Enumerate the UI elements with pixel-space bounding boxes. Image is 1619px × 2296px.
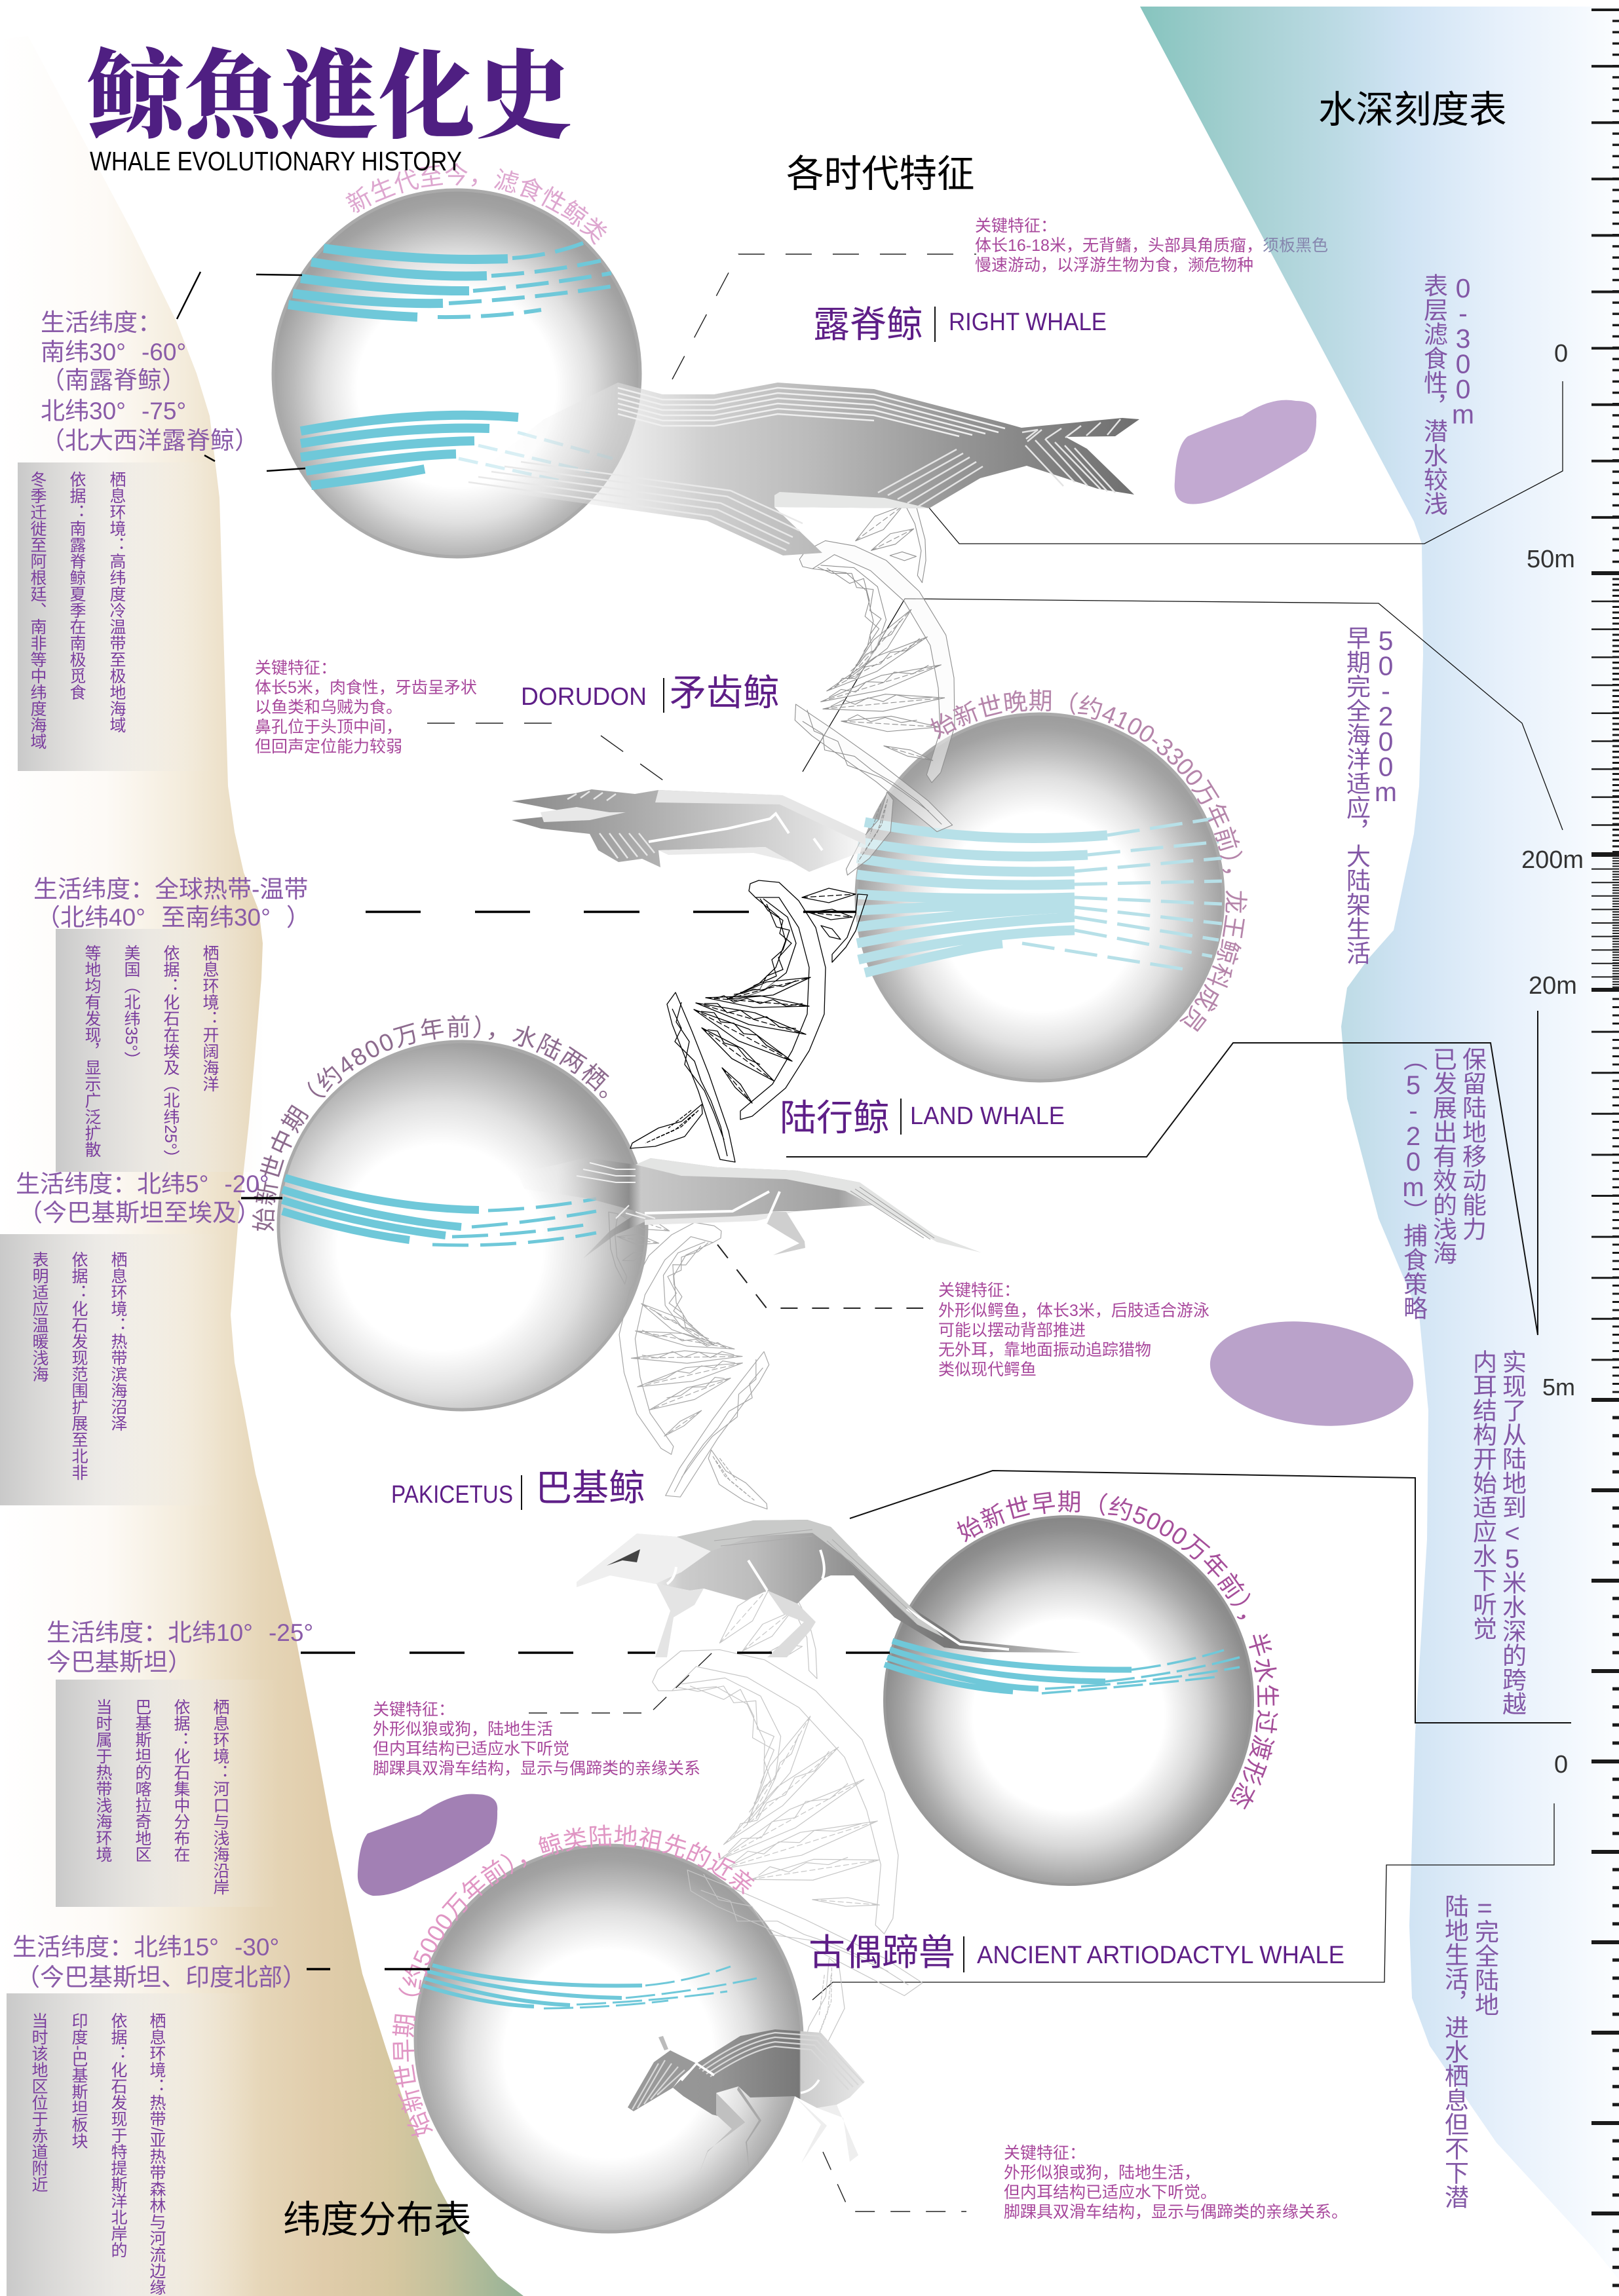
whale: pakicetus bbox=[577, 1520, 1081, 1657]
whale: ancient artiodactyl bbox=[628, 2029, 865, 2174]
habitat notes 3: 依据：化石发现范围扩展至北非 bbox=[69, 1251, 88, 1480]
latitude bands bbox=[885, 1641, 1240, 1693]
label: right whale: 露脊鲸 bbox=[813, 304, 923, 345]
sphere: baleen whale bbox=[273, 190, 640, 557]
label: ancient artiodactyl whale bbox=[809, 1932, 1344, 1973]
label: right whale bbox=[813, 304, 1107, 345]
depth note: 0-300m: 0-300m bbox=[1448, 273, 1478, 424]
key features: land whale: 关键特征： bbox=[938, 1281, 1020, 1300]
depth note: shallow sea: 保留陆地移动能力 bbox=[1458, 1047, 1487, 1241]
label: land whale: LAND WHALE bbox=[910, 1102, 1065, 1130]
habitat notes 2: 依据：化石在埃及（北纬25°） bbox=[161, 945, 180, 1166]
label: dorudon: DORUDON bbox=[521, 683, 647, 711]
ruler labels: 20m bbox=[1529, 972, 1577, 1000]
habitat notes 5 bbox=[29, 2012, 166, 2295]
sphere: early Eocene ancestor bbox=[415, 1845, 802, 2232]
key features: right whale bbox=[975, 217, 1328, 274]
label: pakicetus: PAKICETUS bbox=[391, 1481, 513, 1509]
latitude text 1: （南露脊鲸） bbox=[41, 367, 186, 394]
habitat notes 5: 栖息环境：热带/亚热带森林与河流边缘 bbox=[147, 2012, 166, 2295]
key features: dorudon: 但回声定位能力较弱 bbox=[255, 738, 402, 756]
depth note: 50-200m bbox=[1343, 626, 1401, 965]
whale: right whale bbox=[461, 383, 1139, 555]
label: land whale bbox=[780, 1097, 1065, 1139]
depth note: 0-300m bbox=[1420, 273, 1478, 516]
key features: dorudon: 以鱼类和乌贼为食。 bbox=[255, 698, 402, 717]
latitude text 4: 生活纬度：北纬10° -25° bbox=[47, 1619, 313, 1646]
key features: pakicetus bbox=[373, 1701, 700, 1778]
habitat notes 5: 当时该地区位于赤道附近 bbox=[29, 2012, 48, 2192]
latitude bands north and south bbox=[288, 243, 617, 485]
latitude bands bbox=[282, 1178, 596, 1245]
label: dorudon: 矛齿鲸 bbox=[670, 672, 780, 713]
latitude text 4: 今巴基斯坦） bbox=[47, 1649, 192, 1676]
key features: land whale: 无外耳，靠地面振动追踪猎物 bbox=[938, 1341, 1151, 1359]
latitude text 3: （今巴基斯坦至埃及） bbox=[18, 1199, 261, 1226]
latitude bands bbox=[857, 819, 1222, 973]
depth note: land bbox=[1441, 1894, 1499, 2209]
habitat notes 1: 依据：南露脊鲸夏季在南极觅食 bbox=[67, 471, 86, 700]
latitude text 3 bbox=[16, 1171, 269, 1226]
depth note: land: = 完全陆地 bbox=[1470, 1894, 1499, 2016]
sphere: middle Eocene bbox=[278, 1042, 647, 1410]
ruler labels: 0 bbox=[1554, 340, 1568, 367]
habitat notes 4: 当时属于热带浅海环境 bbox=[94, 1699, 113, 1862]
habitat notes 3: 栖息环境：热带滨海沼泽 bbox=[109, 1251, 127, 1431]
depth note: under 5 m: 内耳结构开始适应水下听觉 bbox=[1469, 1349, 1496, 1640]
ruler labels: 0 bbox=[1554, 1751, 1568, 1778]
depth note: shallow sea: （ 5-20m ）捕食策略 bbox=[1399, 1047, 1428, 1320]
habitat notes 5: 依据：化石发现于特提斯洋北岸的 bbox=[109, 2012, 127, 2258]
label: pakicetus bbox=[391, 1467, 645, 1510]
whale: land whale bbox=[518, 1157, 981, 1258]
key features: pakicetus: 脚踝具双滑车结构，显示与偶蹄类的亲缘关系 bbox=[373, 1760, 700, 1778]
key features: right whale: 慢速游动，以浮游生物为食，濒危物种 bbox=[975, 256, 1253, 274]
latitude text 5: （今巴基斯坦、印度北部） bbox=[16, 1964, 307, 1991]
arc captions around spheres: 始新世晚期（约4100-3300万年前），龙王鲸科成员 bbox=[930, 689, 1248, 1032]
habitat notes 4: 巴基斯坦的喀拉奇地区 bbox=[133, 1699, 152, 1862]
DNA helix 4 bbox=[526, 1558, 1058, 2090]
DNA helix 3 bbox=[541, 1199, 835, 1522]
habitat notes 5: 印度-巴基斯坦板块 bbox=[69, 2012, 88, 2149]
title: 鲸魚進化史 bbox=[87, 19, 572, 158]
key features: ancient artiodactyl: 外形似狼或狗，陆地生活， bbox=[1004, 2164, 1200, 2182]
water depth background bbox=[1140, 7, 1619, 2280]
sphere: early Eocene semi-aquatic bbox=[885, 1516, 1253, 1885]
label: right whale: RIGHT WHALE bbox=[949, 309, 1107, 336]
latitude text 1: （北大西洋露脊鲸） bbox=[41, 427, 259, 454]
subtitle: WHALE EVOLUTIONARY HISTORY bbox=[90, 146, 462, 176]
key features: land whale: 可能以摆动背部推进 bbox=[938, 1321, 1086, 1340]
key features: ancient artiodactyl: 脚踝具双滑车结构，显示与偶蹄类的亲缘关系。 bbox=[1004, 2203, 1348, 2221]
habitat notes 4: 依据：化石集中分布在 bbox=[172, 1699, 190, 1862]
heading: depth scale: 水深刻度表 bbox=[1318, 89, 1507, 131]
arc captions around spheres: 始新世早期（约5000万年前），鲸类陆地祖先的近亲 bbox=[392, 1824, 755, 2137]
latitude text 1: 南纬30° -60° bbox=[41, 339, 186, 366]
depth note: shallow sea: 已发展出有效的浅海 bbox=[1430, 1047, 1457, 1265]
heading: latitude table: 纬度分布表 bbox=[283, 2199, 472, 2241]
key features: dorudon: 关键特征： bbox=[255, 659, 337, 677]
habitat notes 1 bbox=[28, 471, 126, 749]
arc captions around spheres bbox=[252, 162, 1279, 2137]
heading: era features: 各时代特征 bbox=[786, 153, 975, 195]
depth ruler bbox=[1591, 9, 1619, 2296]
label: ancient artiodactyl whale: ANCIENT ARTIODACTYL WHALE bbox=[977, 1942, 1344, 1969]
key features: pakicetus: 但内耳结构已适应水下听觉 bbox=[373, 1740, 569, 1758]
habitat notes 2: 等地均有发现，显示广泛扩散 bbox=[83, 945, 101, 1157]
latitude text 5: 生活纬度：北纬15° -30° bbox=[12, 1934, 279, 1961]
key features: pakicetus: 外形似狼或狗，陆地生活 bbox=[373, 1720, 553, 1739]
depth note: under 5 m: 实现了从陆地到 <5 米水深的跨越 bbox=[1498, 1349, 1527, 1716]
depth note: shallow sea bbox=[1399, 1047, 1487, 1320]
depth note: under 5 m bbox=[1469, 1349, 1527, 1716]
key features: dorudon bbox=[255, 659, 477, 756]
key features: dorudon: 体长5米，肉食性，牙齿呈矛状 bbox=[255, 679, 477, 697]
key features: land whale bbox=[938, 1281, 1209, 1379]
depth note: 0-300m: 表层滤食性，潜水较浅 bbox=[1420, 273, 1447, 516]
key features: ancient artiodactyl: 关键特征： bbox=[1004, 2144, 1086, 2162]
sphere: late Eocene bbox=[856, 714, 1223, 1081]
depth note: 50-200m: 50-200m bbox=[1371, 626, 1401, 802]
gray note panels bbox=[0, 462, 278, 2296]
key features: dorudon: 鼻孔位于头顶中间， bbox=[255, 718, 402, 736]
habitat notes 4: 栖息环境：河口与浅海沿岸 bbox=[211, 1699, 229, 1895]
depth note: land: 陆地生活，进水栖息但不下潜 bbox=[1441, 1894, 1469, 2209]
latitude bands bbox=[423, 1965, 757, 2008]
habitat notes 2 bbox=[83, 945, 219, 1166]
label: dorudon bbox=[521, 672, 780, 713]
latitude text 1: 生活纬度： bbox=[41, 309, 162, 336]
latitude text 1 bbox=[41, 309, 259, 454]
purple blobs bbox=[1175, 400, 1316, 504]
dashed connectors bbox=[427, 254, 976, 2211]
ruler labels bbox=[1521, 340, 1584, 1778]
latitude distribution background bbox=[0, 36, 524, 2296]
connector lines bbox=[786, 381, 1571, 2000]
habitat notes 1: 冬季迁徙至阿根廷、南非等中纬度海域 bbox=[28, 471, 47, 749]
habitat notes 2: 栖息环境：开阔海洋 bbox=[200, 945, 219, 1092]
latitude text 3: 生活纬度：北纬5° -20° bbox=[16, 1171, 269, 1197]
latitude text 5 bbox=[12, 1934, 307, 1991]
arc captions around spheres: 始新世早期（约5000万年前），半水生过渡形态 bbox=[957, 1490, 1279, 1809]
habitat notes 2: 美国（北纬35°） bbox=[122, 945, 140, 1068]
depth note: 50-200m: 早期完全海洋适应，大陆架生活 bbox=[1343, 626, 1371, 965]
label: land whale: 陆行鲸 bbox=[780, 1097, 890, 1139]
habitat notes 3: 表明适应温暖浅海 bbox=[30, 1251, 48, 1382]
ruler labels: 5m bbox=[1542, 1374, 1575, 1401]
key features: land whale: 类似现代鳄鱼 bbox=[938, 1361, 1037, 1379]
key features: pakicetus: 关键特征： bbox=[373, 1701, 455, 1719]
latitude text 1: 北纬30° -75° bbox=[41, 398, 186, 424]
key features: land whale: 外形似鳄鱼，体长3米，后肢适合游泳 bbox=[938, 1302, 1209, 1320]
habitat notes 3 bbox=[30, 1251, 127, 1480]
thick latitude marker dashes bbox=[177, 272, 890, 1969]
DNA helix 2 bbox=[630, 880, 867, 1162]
habitat notes 1: 栖息环境：高纬度冷温带至极地海域 bbox=[107, 471, 126, 733]
key features: right whale: 关键特征： bbox=[975, 217, 1057, 235]
whale: dorudon bbox=[512, 789, 866, 872]
label: ancient artiodactyl whale: 古偶蹄兽 bbox=[809, 1932, 955, 1973]
latitude text 2: （北纬40° 至南纬30° ） bbox=[36, 904, 311, 931]
latitude text 2 bbox=[33, 876, 311, 931]
arc captions around spheres: 新生代至今，滤食性鲸类 bbox=[345, 162, 607, 245]
key features: ancient artiodactyl bbox=[1004, 2144, 1348, 2221]
ruler labels: 50m bbox=[1527, 546, 1575, 573]
habitat notes 4 bbox=[94, 1699, 229, 1895]
ruler labels: 200m bbox=[1521, 846, 1584, 874]
latitude text 2: 生活纬度：全球热带-温带 bbox=[33, 876, 308, 903]
DNA helix 1 bbox=[687, 486, 1075, 888]
arc captions around spheres: 始新世中期（约4800万年前），水陆两栖。 bbox=[252, 1015, 609, 1232]
key features: right whale: 体长16-18米，无背鳍，头部具角质瘤，须板黑色 bbox=[975, 236, 1328, 255]
key features: ancient artiodactyl: 但内耳结构已适应水下听觉。 bbox=[1004, 2183, 1217, 2202]
label: pakicetus: 巴基鲸 bbox=[535, 1467, 645, 1509]
latitude text 4 bbox=[47, 1619, 313, 1676]
